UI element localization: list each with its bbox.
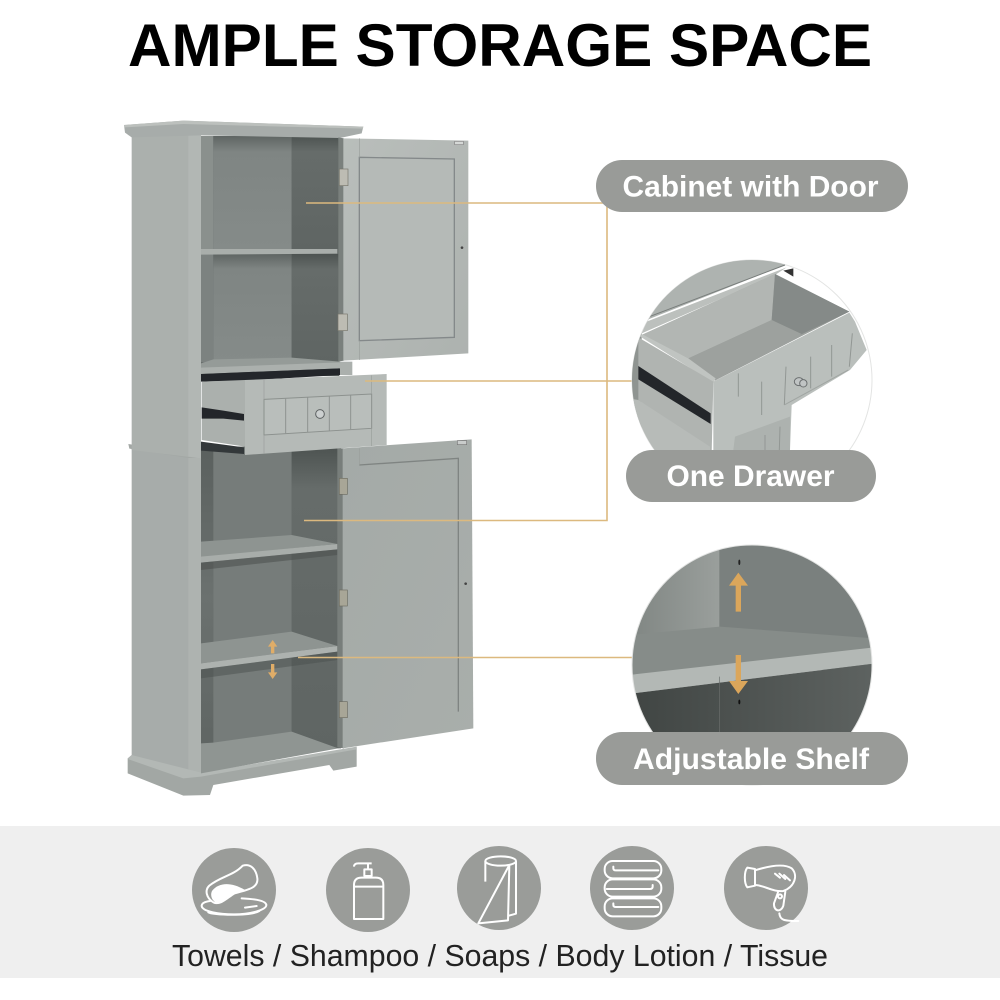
- leader lines: [298, 203, 632, 658]
- crown: [124, 121, 363, 138]
- hinges: [338, 169, 348, 331]
- drawer knob: [794, 378, 807, 387]
- icon: towels: [590, 846, 674, 930]
- label: cabinet with door: [596, 160, 908, 212]
- panel: storage uses band: [0, 826, 1000, 978]
- label: adjustable shelf: [596, 732, 908, 785]
- down arrow: [729, 655, 748, 694]
- icon: hair dryer: [724, 846, 808, 930]
- knob: [316, 410, 324, 418]
- hinges: [339, 478, 347, 718]
- shelf: [201, 249, 337, 255]
- compartment floor: [201, 358, 340, 368]
- right edge: [338, 137, 344, 362]
- label: one drawer: [626, 450, 876, 502]
- title: AMPLE STORAGE SPACE: [128, 12, 872, 79]
- lower cabinet: [128, 439, 473, 796]
- door upper: [343, 138, 468, 361]
- label: cabinet with door: Cabinet with Door: [622, 170, 879, 204]
- drawer front: [713, 313, 867, 450]
- drawer: [201, 374, 387, 455]
- base plinth: [128, 747, 357, 796]
- adjustable shelf: [201, 632, 337, 663]
- label: one drawer: One Drawer: [666, 460, 835, 493]
- cabinet floor: [201, 732, 338, 773]
- shelf arrows: [268, 640, 277, 679]
- label: adjustable shelf: Adjustable Shelf: [633, 743, 870, 776]
- right edge: [337, 448, 344, 748]
- door lower: [343, 439, 473, 748]
- cabinet illustration: [124, 121, 473, 796]
- upper cabinet: [124, 121, 468, 458]
- detail circle: adjustable shelf: [632, 544, 872, 786]
- detail circle: drawer: [632, 260, 872, 450]
- icon: soap: [192, 848, 276, 932]
- drawer rim: [639, 334, 716, 383]
- up arrow: [729, 573, 748, 612]
- caption: Towels / Shampoo / Soaps / Body Lotion / Tissue: [172, 938, 828, 973]
- upper shelf: [201, 535, 337, 557]
- icon: shampoo bottle: [326, 848, 410, 932]
- drawer inner walls: [642, 274, 775, 358]
- icon: paper roll: [457, 846, 541, 930]
